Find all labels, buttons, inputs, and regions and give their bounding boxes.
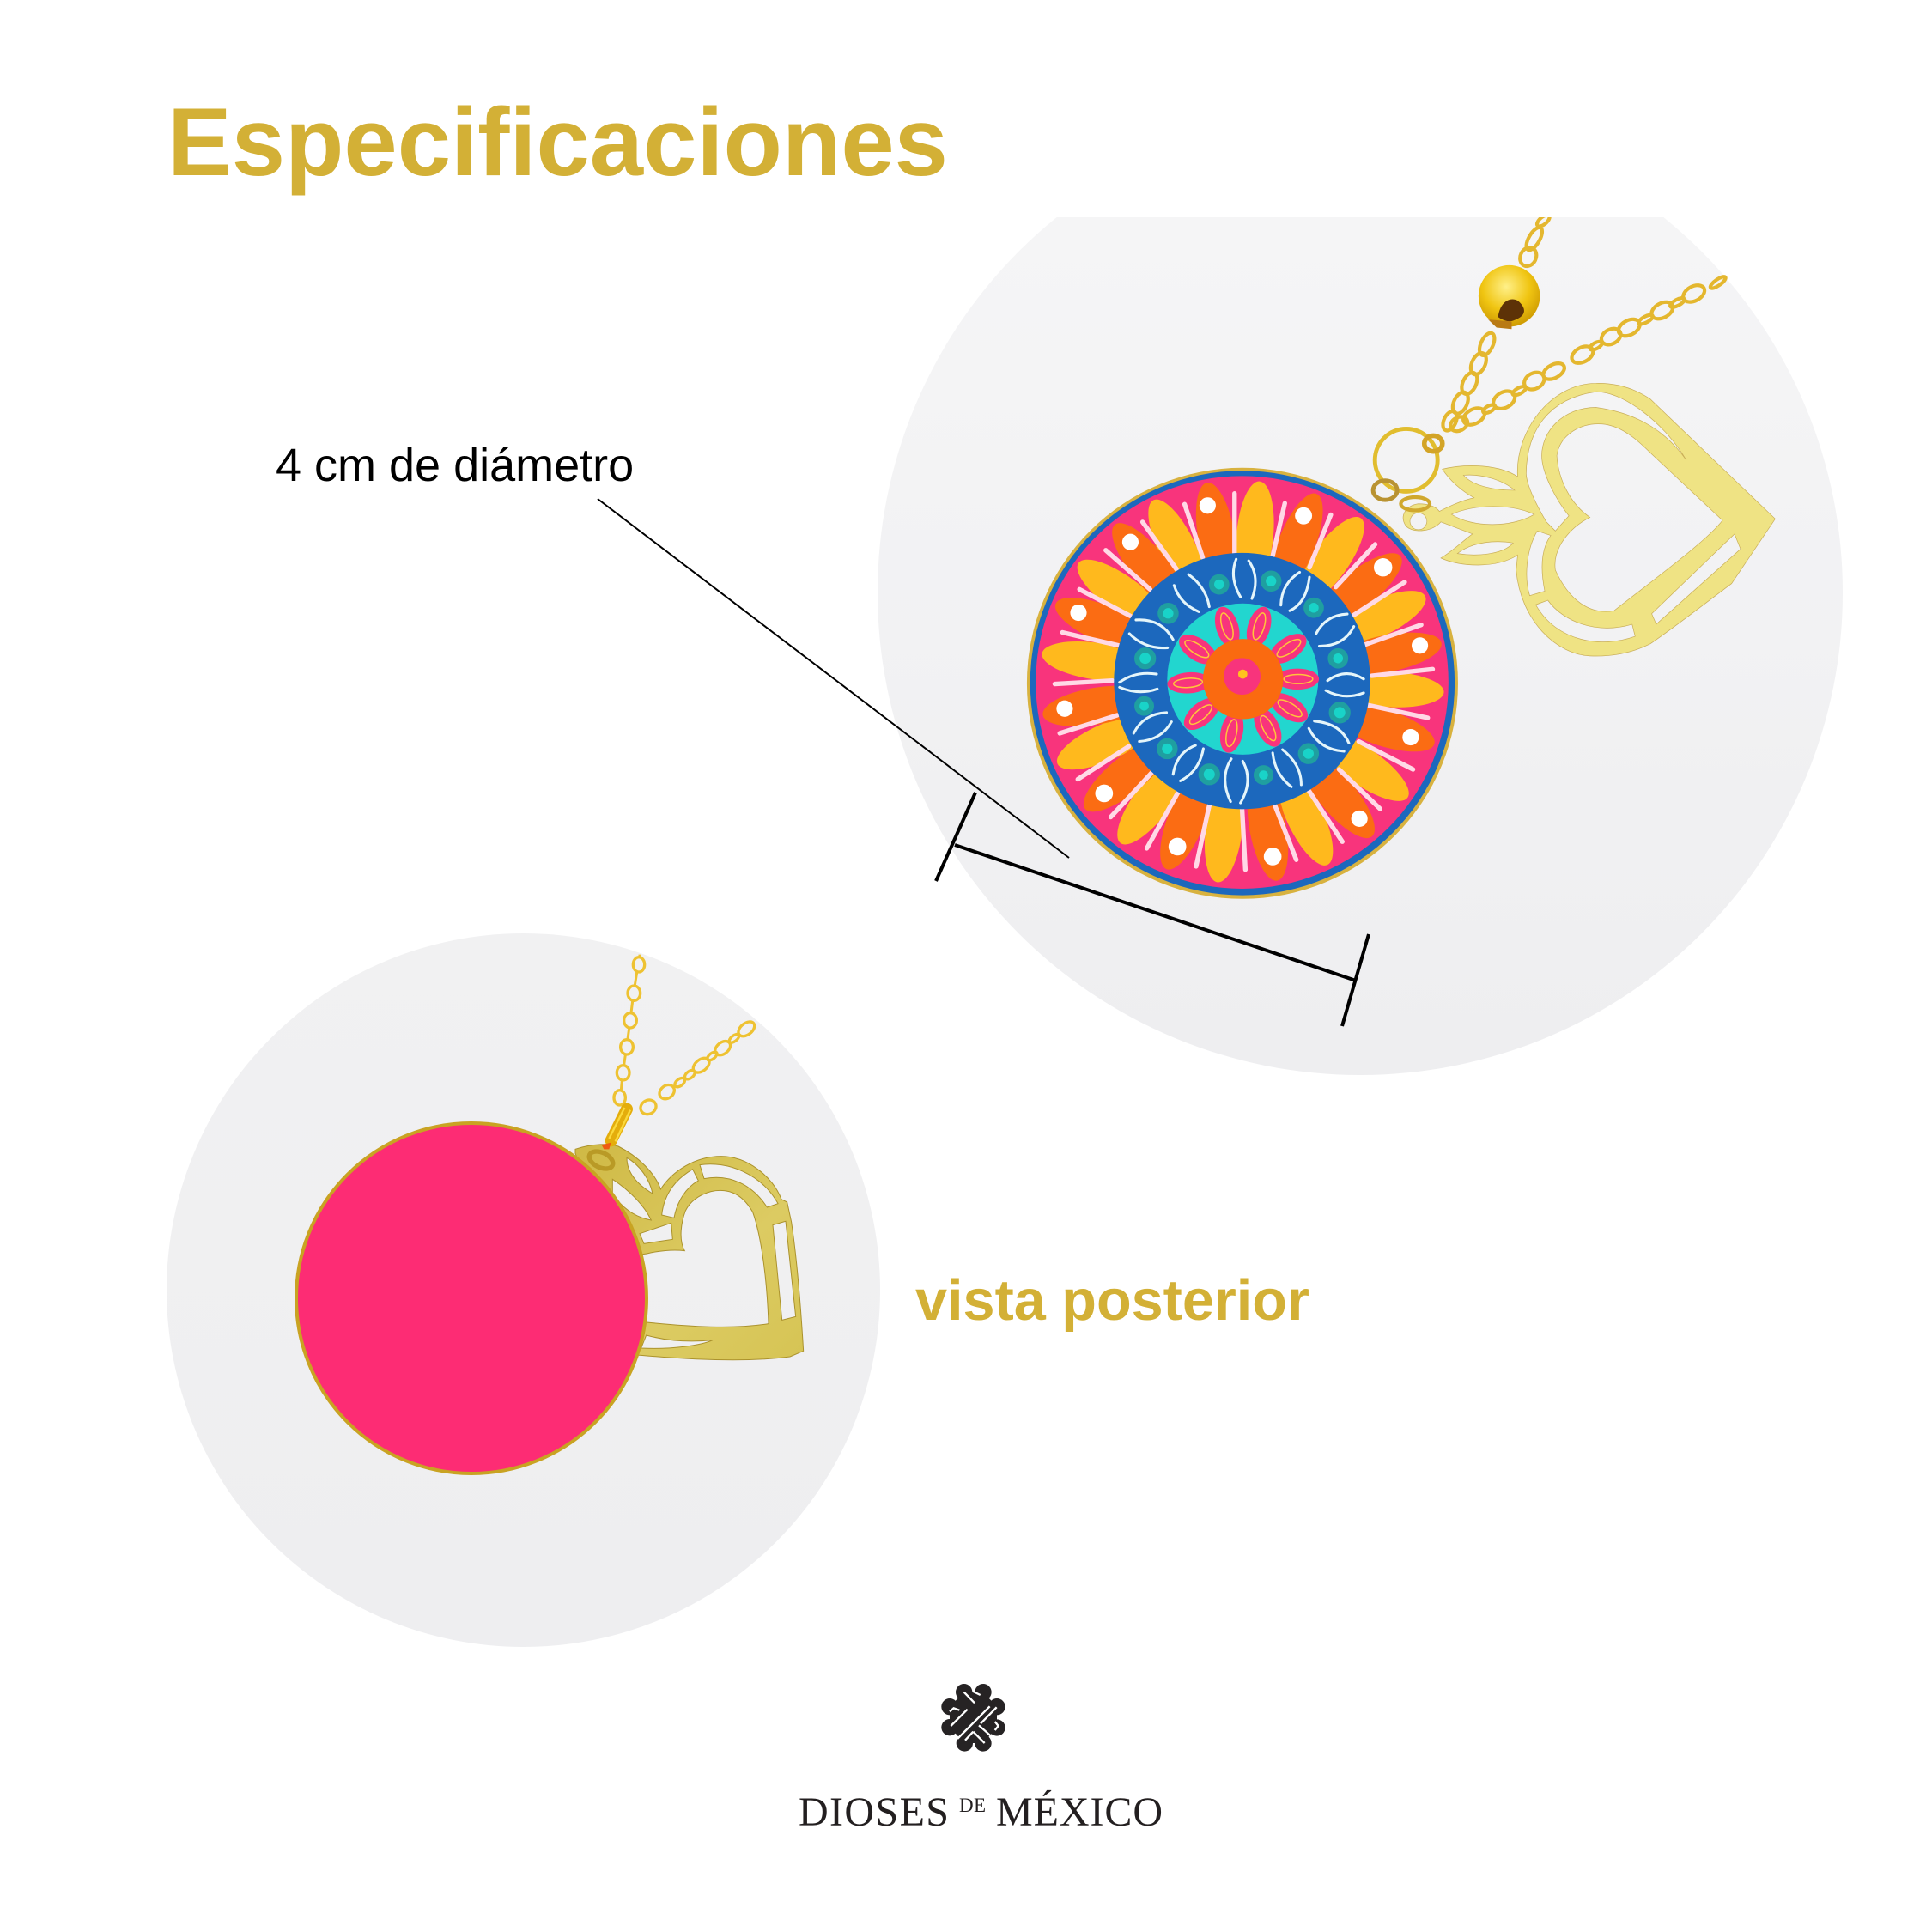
back chains — [614, 955, 757, 1117]
wordmark: DE — [959, 1795, 986, 1816]
back of round pendant — [296, 1123, 647, 1473]
heart charm — [1403, 383, 1775, 656]
photo background circle — [167, 933, 880, 1647]
label: back view: vista posterior — [915, 1269, 1309, 1333]
front pendant: painted mandala — [1027, 468, 1458, 899]
logo: Dioses de México — [799, 1684, 1163, 1835]
leader line — [598, 499, 1069, 858]
clasp — [611, 1109, 627, 1140]
wordmark — [799, 1789, 1163, 1835]
title: Especificaciones — [167, 88, 948, 196]
dimension line with end ticks — [936, 793, 1369, 1026]
label: diameter: 4 cm de diámetro — [276, 440, 634, 491]
bead — [1479, 265, 1540, 329]
first chain — [1440, 213, 1552, 433]
photo background circle — [878, 217, 1843, 1075]
panel: back view photo — [167, 933, 880, 1647]
second chain — [1448, 275, 1727, 434]
wordmark: MÉXICO — [996, 1789, 1163, 1835]
front chains, bead and heart charm — [1373, 213, 1775, 656]
icon: knot emblem — [941, 1684, 1005, 1752]
wordmark: DIOSES — [799, 1789, 949, 1835]
jump ring — [1373, 428, 1443, 510]
panel: front view photo — [878, 217, 1843, 1075]
back of heart charm — [575, 1145, 804, 1360]
